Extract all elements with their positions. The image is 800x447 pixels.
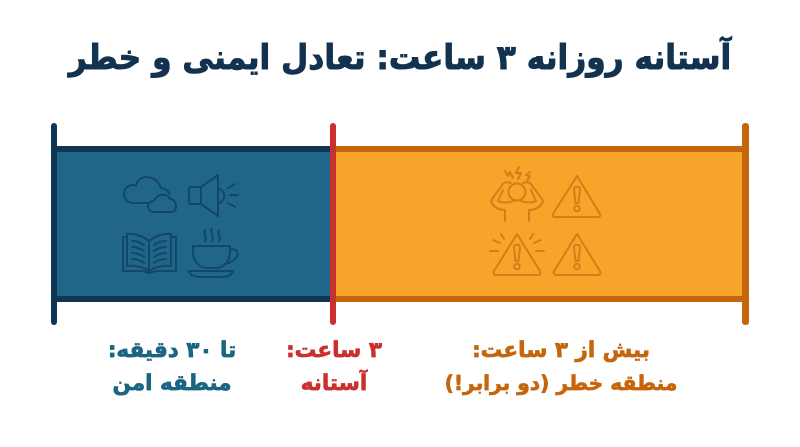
- label: safe zone: [108, 338, 236, 396]
- label: threshold: [286, 338, 382, 396]
- panel: danger zone: [333, 149, 745, 299]
- right boundary marker: [742, 123, 749, 325]
- label: threshold: ۳ ساعت:: [286, 338, 382, 363]
- label: threshold: آستانه: [301, 371, 367, 396]
- icon: clouds: [124, 177, 176, 212]
- label: danger zone: [445, 338, 677, 396]
- title: آستانه روزانه ۳ ساعت: تعادل ایمنی و خطر: [69, 38, 731, 78]
- icon: warning triangle bottom: [554, 234, 600, 275]
- left boundary marker: [51, 123, 57, 325]
- icon: speaker: [189, 175, 238, 216]
- icon: warning triangle top: [553, 176, 600, 217]
- icon: warning triangle with rays: [490, 234, 544, 275]
- icon: coffee cup: [189, 229, 238, 277]
- panel: safe zone: [54, 149, 333, 299]
- icon: stressed person: [491, 167, 543, 221]
- threshold marker: [330, 123, 336, 325]
- label: danger zone: بیش از ۳ ساعت:: [472, 338, 650, 363]
- label: safe zone: منطقه امن: [112, 371, 232, 396]
- label: danger zone: منطقه خطر (دو برابر!): [445, 371, 677, 395]
- icon: open book: [123, 234, 176, 273]
- label: safe zone: تا ۳۰ دقیقه:: [108, 338, 236, 363]
